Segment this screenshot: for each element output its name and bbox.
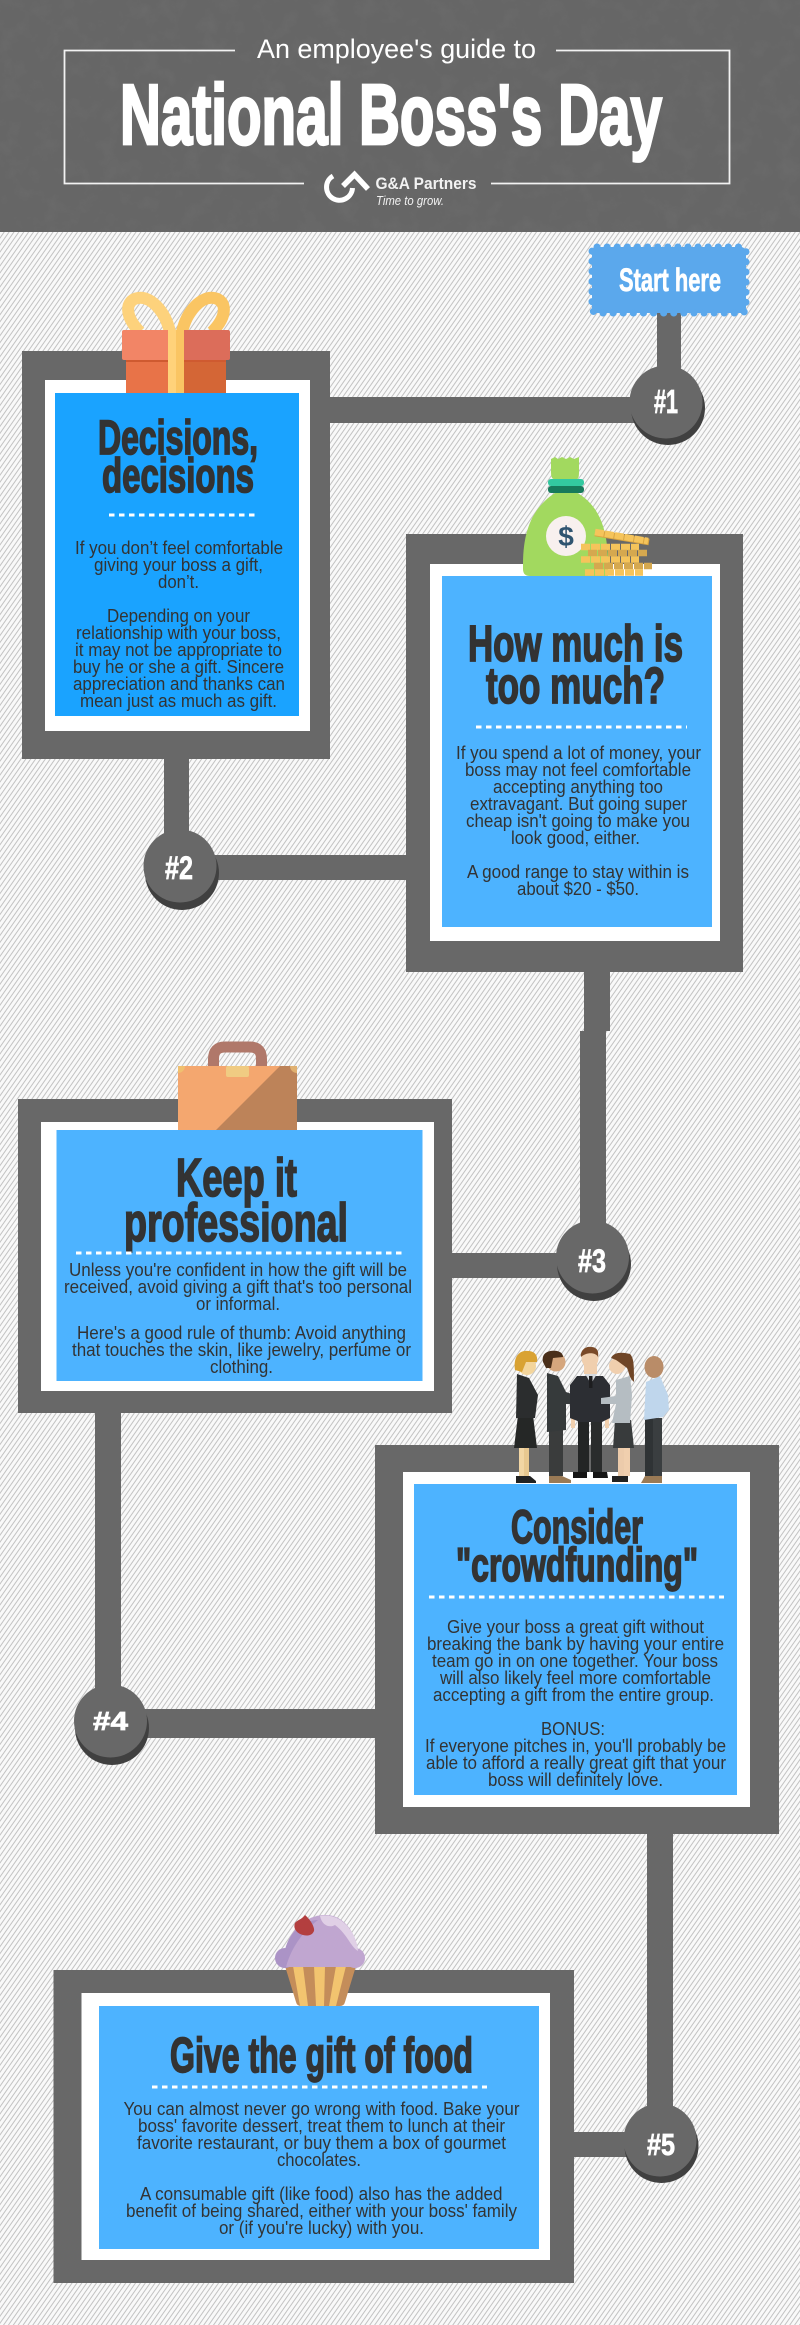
logo tagline: Time to grow.	[376, 193, 444, 208]
logo	[327, 174, 476, 208]
panel body text: buy he or she a gift. Sincere	[73, 657, 284, 677]
panel: food	[54, 1915, 574, 2283]
subtitle: An employee's guide to	[257, 34, 536, 64]
panel: keep it professional	[18, 1047, 452, 1413]
panel: decisions	[22, 298, 330, 759]
panel body text: Unless you're confident in how the gift will be	[69, 1260, 407, 1280]
panel body text: A consumable gift (like food) also has the added	[140, 2184, 502, 2204]
panel frame	[22, 351, 330, 759]
panel frame	[406, 534, 743, 972]
panel body text	[124, 2099, 520, 2238]
step marker #1: #1	[654, 383, 678, 420]
panel body text: or (if you're lucky) with you.	[219, 2218, 424, 2238]
step marker #4: #4	[93, 1706, 129, 1736]
panel heading: Give the gift of food	[170, 2029, 473, 2083]
panel body text: relationship with your boss,	[76, 623, 281, 643]
panel body text: cheap isn't going to make you	[466, 811, 690, 831]
header frame	[64, 50, 730, 184]
dashed divider	[76, 1252, 402, 1254]
step marker #1	[630, 366, 705, 445]
panel frame	[375, 1445, 779, 1834]
panel blue card	[55, 393, 299, 716]
icon: money bag: $	[558, 521, 574, 552]
step marker #2	[144, 830, 219, 910]
panel body text: will also likely feel more comfortable	[439, 1668, 711, 1688]
panel heading	[468, 615, 683, 714]
panel body text: A good range to stay within is	[467, 862, 689, 882]
icon: cupcake	[275, 1915, 365, 2006]
dashed divider	[152, 2086, 487, 2088]
panel body text	[456, 743, 701, 899]
panel body text: or informal.	[196, 1294, 280, 1314]
panel body text: If everyone pitches in, you'll probably be	[425, 1736, 726, 1756]
panel body text: mean just as much as gift.	[80, 691, 277, 711]
panel body text: boss' favorite dessert, treat them to lunch at their	[138, 2116, 505, 2136]
panel white mat	[82, 1993, 550, 2260]
panel body text: If you spend a lot of money, your	[456, 743, 701, 763]
panel body text: You can almost never go wrong with food. Bake your	[124, 2099, 520, 2119]
panel frame	[54, 1970, 574, 2283]
icon: briefcase	[178, 1047, 297, 1130]
panel body text: clothing.	[210, 1357, 273, 1377]
panel body text: breaking the bank by having your entire	[427, 1634, 724, 1654]
panel: how much	[406, 457, 743, 972]
panel body text: accepting anything too	[493, 777, 663, 797]
person 4	[601, 1353, 634, 1482]
connector paths	[95, 310, 681, 2157]
icon: money bag	[523, 457, 652, 576]
panel body text: BONUS:	[541, 1719, 605, 1739]
panel white mat	[41, 1122, 434, 1391]
panel body text: benefit of being shared, either with your boss' family	[126, 2201, 517, 2221]
person 1	[514, 1351, 538, 1483]
person 5	[641, 1356, 669, 1483]
logo mark	[327, 174, 368, 200]
step marker #3: #3	[578, 1243, 606, 1279]
panel body text: team go in on one together. Your boss	[432, 1651, 718, 1671]
panel: crowdfunding	[375, 1347, 779, 1834]
panel body text: Depending on your	[107, 606, 250, 626]
panel heading: Keep it	[176, 1148, 297, 1208]
icon: team of people	[514, 1347, 669, 1483]
panel body text: If you don’t feel comfortable	[75, 538, 283, 558]
coins	[581, 532, 652, 572]
panel body text: favorite restaurant, or buy them a box of gourmet	[137, 2133, 506, 2153]
panel body text	[425, 1617, 726, 1790]
dashed divider	[109, 514, 255, 516]
step marker #5	[624, 2104, 698, 2183]
panel blue card	[442, 576, 712, 927]
panel body text: received, avoid giving a gift that's too personal	[64, 1277, 412, 1297]
logo name: G&A Partners	[376, 174, 476, 193]
person 2	[543, 1351, 594, 1483]
panel heading: How much is	[468, 615, 683, 672]
panel blue card	[56, 1130, 422, 1381]
panel body text: look good, either.	[511, 828, 640, 848]
panel body text: boss may not feel comfortable	[465, 760, 691, 780]
panel heading: Consider	[511, 1500, 643, 1553]
panel body text: it may not be appropriate to	[75, 640, 282, 660]
icon: gift	[122, 298, 230, 393]
panel body text: about $20 - $50.	[517, 879, 639, 899]
sign label: Start here	[619, 262, 721, 298]
panel heading: decisions	[102, 450, 254, 503]
start here sign	[592, 247, 746, 313]
panel heading: Decisions,	[98, 412, 258, 465]
panel white mat	[403, 1472, 750, 1807]
panel heading	[98, 412, 258, 503]
panel frame	[18, 1099, 452, 1413]
dashed divider	[429, 1596, 724, 1598]
panel body text: giving your boss a gift,	[94, 555, 263, 575]
panel body text: appreciation and thanks can	[73, 674, 285, 694]
panel body text: extravagant. But going super	[470, 794, 687, 814]
panel body text: boss will definitely love.	[488, 1770, 663, 1790]
panel body text	[73, 538, 285, 711]
panel body text: don’t.	[158, 572, 199, 592]
step marker #4	[74, 1684, 149, 1765]
panel body text: able to afford a really great gift that your	[426, 1753, 726, 1773]
dashed divider	[476, 726, 687, 728]
panel body text: accepting a gift from the entire group.	[433, 1685, 714, 1705]
panel white mat	[430, 564, 720, 941]
panel blue card	[99, 2006, 539, 2249]
panel body text: Give your boss a great gift without	[447, 1617, 704, 1637]
step marker #3	[556, 1220, 631, 1301]
person 3	[570, 1347, 610, 1478]
panel heading: professional	[124, 1193, 348, 1253]
header banner	[0, 0, 800, 232]
panel body text: Here's a good rule of thumb: Avoid anything	[77, 1323, 406, 1343]
step marker #5: #5	[647, 2127, 675, 2162]
panel heading	[124, 1148, 348, 1253]
panel heading	[456, 1500, 698, 1591]
step marker #2: #2	[165, 850, 193, 886]
panel body text	[64, 1260, 412, 1377]
panel body text: that touches the skin, like jewelry, perfume or	[72, 1340, 411, 1360]
panel heading: too much?	[486, 657, 665, 714]
panel body text: chocolates.	[277, 2150, 361, 2170]
panel blue card	[414, 1484, 737, 1795]
panel white mat	[45, 380, 310, 731]
